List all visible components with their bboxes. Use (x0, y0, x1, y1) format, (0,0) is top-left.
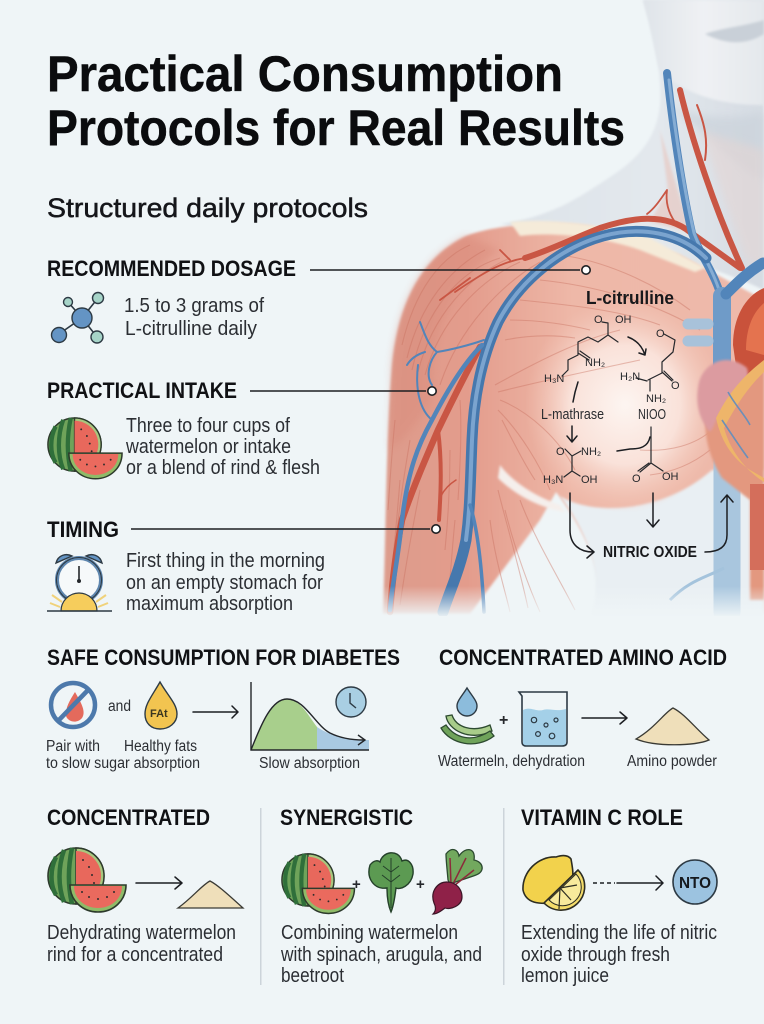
icon: powder pile (178, 881, 243, 908)
molecule: lower left: OH (581, 474, 598, 486)
captions: Watermeln, dehydration (438, 753, 585, 770)
text: maximum absorption (126, 593, 293, 615)
text: beetroot (281, 965, 344, 987)
arrow: down to nitric oxide (647, 493, 659, 527)
molecule: lower left: NH₂ (581, 446, 601, 458)
molecule: top right (620, 328, 680, 405)
pale gap between chest and lat (498, 465, 565, 512)
blue veins (390, 73, 763, 612)
callout line (250, 387, 436, 395)
molecule: lower left (543, 446, 601, 486)
text: on an empty stomach for (126, 572, 323, 594)
red arteries (390, 90, 742, 612)
plus: + (499, 712, 508, 729)
text: Combining watermelon (281, 922, 458, 944)
captions (46, 738, 360, 772)
cream collar band (510, 221, 705, 272)
captions: to slow sugar absorption (46, 755, 200, 772)
title: Practical Consumption (47, 46, 563, 102)
bottom fade of illustration (360, 586, 764, 618)
text (521, 922, 717, 987)
captions (438, 753, 717, 770)
deltoid shading (390, 236, 500, 450)
molecule: top left: NH₂ (585, 357, 605, 369)
label: L-citrulline: L-citrulline (586, 288, 674, 308)
text: Extending the life of nitric (521, 922, 717, 944)
heading: SAFE CONSUMPTION FOR DIABETES (47, 645, 400, 670)
icon: beetroot (433, 850, 482, 914)
captions: Pair with (46, 738, 100, 755)
arrow (193, 706, 238, 718)
captions: Slow absorption (259, 755, 360, 772)
text: First thing in the morning (126, 550, 325, 572)
enzyme labels: NIOO (638, 406, 666, 423)
text (126, 550, 325, 615)
text: L-citrulline daily (125, 318, 257, 340)
heading: PRACTICAL INTAKE (47, 378, 237, 403)
text: Three to four cups of (126, 415, 290, 437)
heart (670, 288, 764, 600)
heading: TIMING (47, 517, 119, 542)
text (125, 415, 320, 479)
text (280, 922, 482, 987)
arrow: dashed to circle (593, 876, 663, 890)
icon: molecule (52, 292, 104, 343)
text: with spinach, arugula, and (280, 944, 482, 966)
label: nitric oxide: NITRIC OXIDE (603, 544, 697, 561)
subtitle: Structured daily protocols (47, 193, 368, 223)
heading: RECOMMENDED DOSAGE (47, 256, 296, 281)
molecule: top right: H₂N (620, 371, 640, 383)
molecule: lower right: OH (662, 471, 679, 483)
icon: spinach (369, 853, 413, 912)
molecule: top right: O (671, 380, 680, 392)
arrow: top reaction (628, 337, 646, 355)
captions: Healthy fats (124, 738, 197, 755)
text: 1.5 to 3 grams of (124, 295, 264, 317)
muscle fibres (388, 245, 712, 612)
illustration: human anatomy (360, 0, 764, 628)
title (47, 46, 625, 156)
arrow: nitric oxide to vessel (705, 495, 733, 552)
icon: NTO circle (673, 860, 717, 904)
captions: Amino powder (627, 753, 717, 770)
icon: watermelon (48, 848, 126, 912)
heading: CONCENTRATED (47, 805, 210, 830)
icon: watermelon (48, 418, 122, 479)
icon: fat drop (145, 682, 177, 729)
arrow: enzyme to amide (567, 426, 577, 442)
text: watermelon or intake (125, 436, 291, 458)
panel: concentrated amino acid (438, 645, 727, 770)
arrow (582, 712, 627, 724)
icon: beaker (519, 692, 567, 746)
section: timing (47, 517, 440, 615)
panel: concentrated (47, 805, 243, 966)
heading: SYNERGISTIC (280, 805, 413, 830)
chest highlight (525, 297, 725, 513)
icon: no sugar (51, 683, 95, 727)
panel: synergistic (280, 805, 482, 987)
pale torso below chest (560, 470, 764, 620)
molecule: top left: O (594, 314, 603, 326)
icon: lemon (523, 856, 585, 910)
icon: fat drop: FAt (150, 708, 168, 720)
molecule: lower left: O (556, 446, 565, 458)
icon: water drop on rind (441, 688, 494, 744)
text (47, 922, 236, 966)
molecule: lower right (617, 427, 679, 485)
plus: + (416, 876, 425, 893)
text: lemon juice (521, 965, 609, 987)
section: recommended dosage (47, 256, 590, 343)
section: practical intake (47, 378, 436, 479)
text: or a blend of rind & flesh (126, 457, 320, 479)
arrow: curve to nitric oxide (570, 493, 594, 558)
panel: vitamin c role (521, 805, 717, 987)
molecule: top left: OH (615, 314, 632, 326)
molecule: top right: NH₂ (646, 393, 666, 405)
icon: NTO circle: NTO (679, 875, 711, 892)
title: Protocols for Real Results (47, 100, 625, 156)
text: oxide through fresh (521, 944, 670, 966)
icon: watermelon (282, 854, 354, 913)
heading: VITAMIN C ROLE (521, 805, 683, 830)
panel: safe consumption for diabetes (46, 645, 400, 772)
plus: + (352, 876, 361, 893)
icon: powder pile (636, 708, 709, 745)
label: and: and (108, 698, 131, 715)
neck and chin (500, 0, 764, 290)
text: rind for a concentrated (47, 944, 223, 966)
arrow (136, 877, 182, 889)
text: Dehydrating watermelon (47, 922, 236, 944)
icon: alarm clock with sunrise (47, 555, 112, 611)
enzyme labels: L-mathrase (541, 406, 604, 423)
heading: CONCENTRATED AMINO ACID (439, 645, 727, 670)
shoulder, arm and chest muscles (383, 224, 764, 614)
callout line (310, 266, 590, 274)
molecule: top left: H₃N (544, 373, 564, 385)
chemistry pathway diagram (541, 288, 733, 561)
molecule: lower right: O (632, 473, 641, 485)
molecule: lower left: H₃N (543, 474, 563, 486)
callout line (131, 525, 440, 533)
enzyme labels (541, 406, 666, 423)
text (124, 295, 264, 340)
chart: slow absorption curve (251, 682, 369, 750)
molecule: top right: O (656, 328, 665, 340)
molecule: top left (544, 314, 632, 385)
